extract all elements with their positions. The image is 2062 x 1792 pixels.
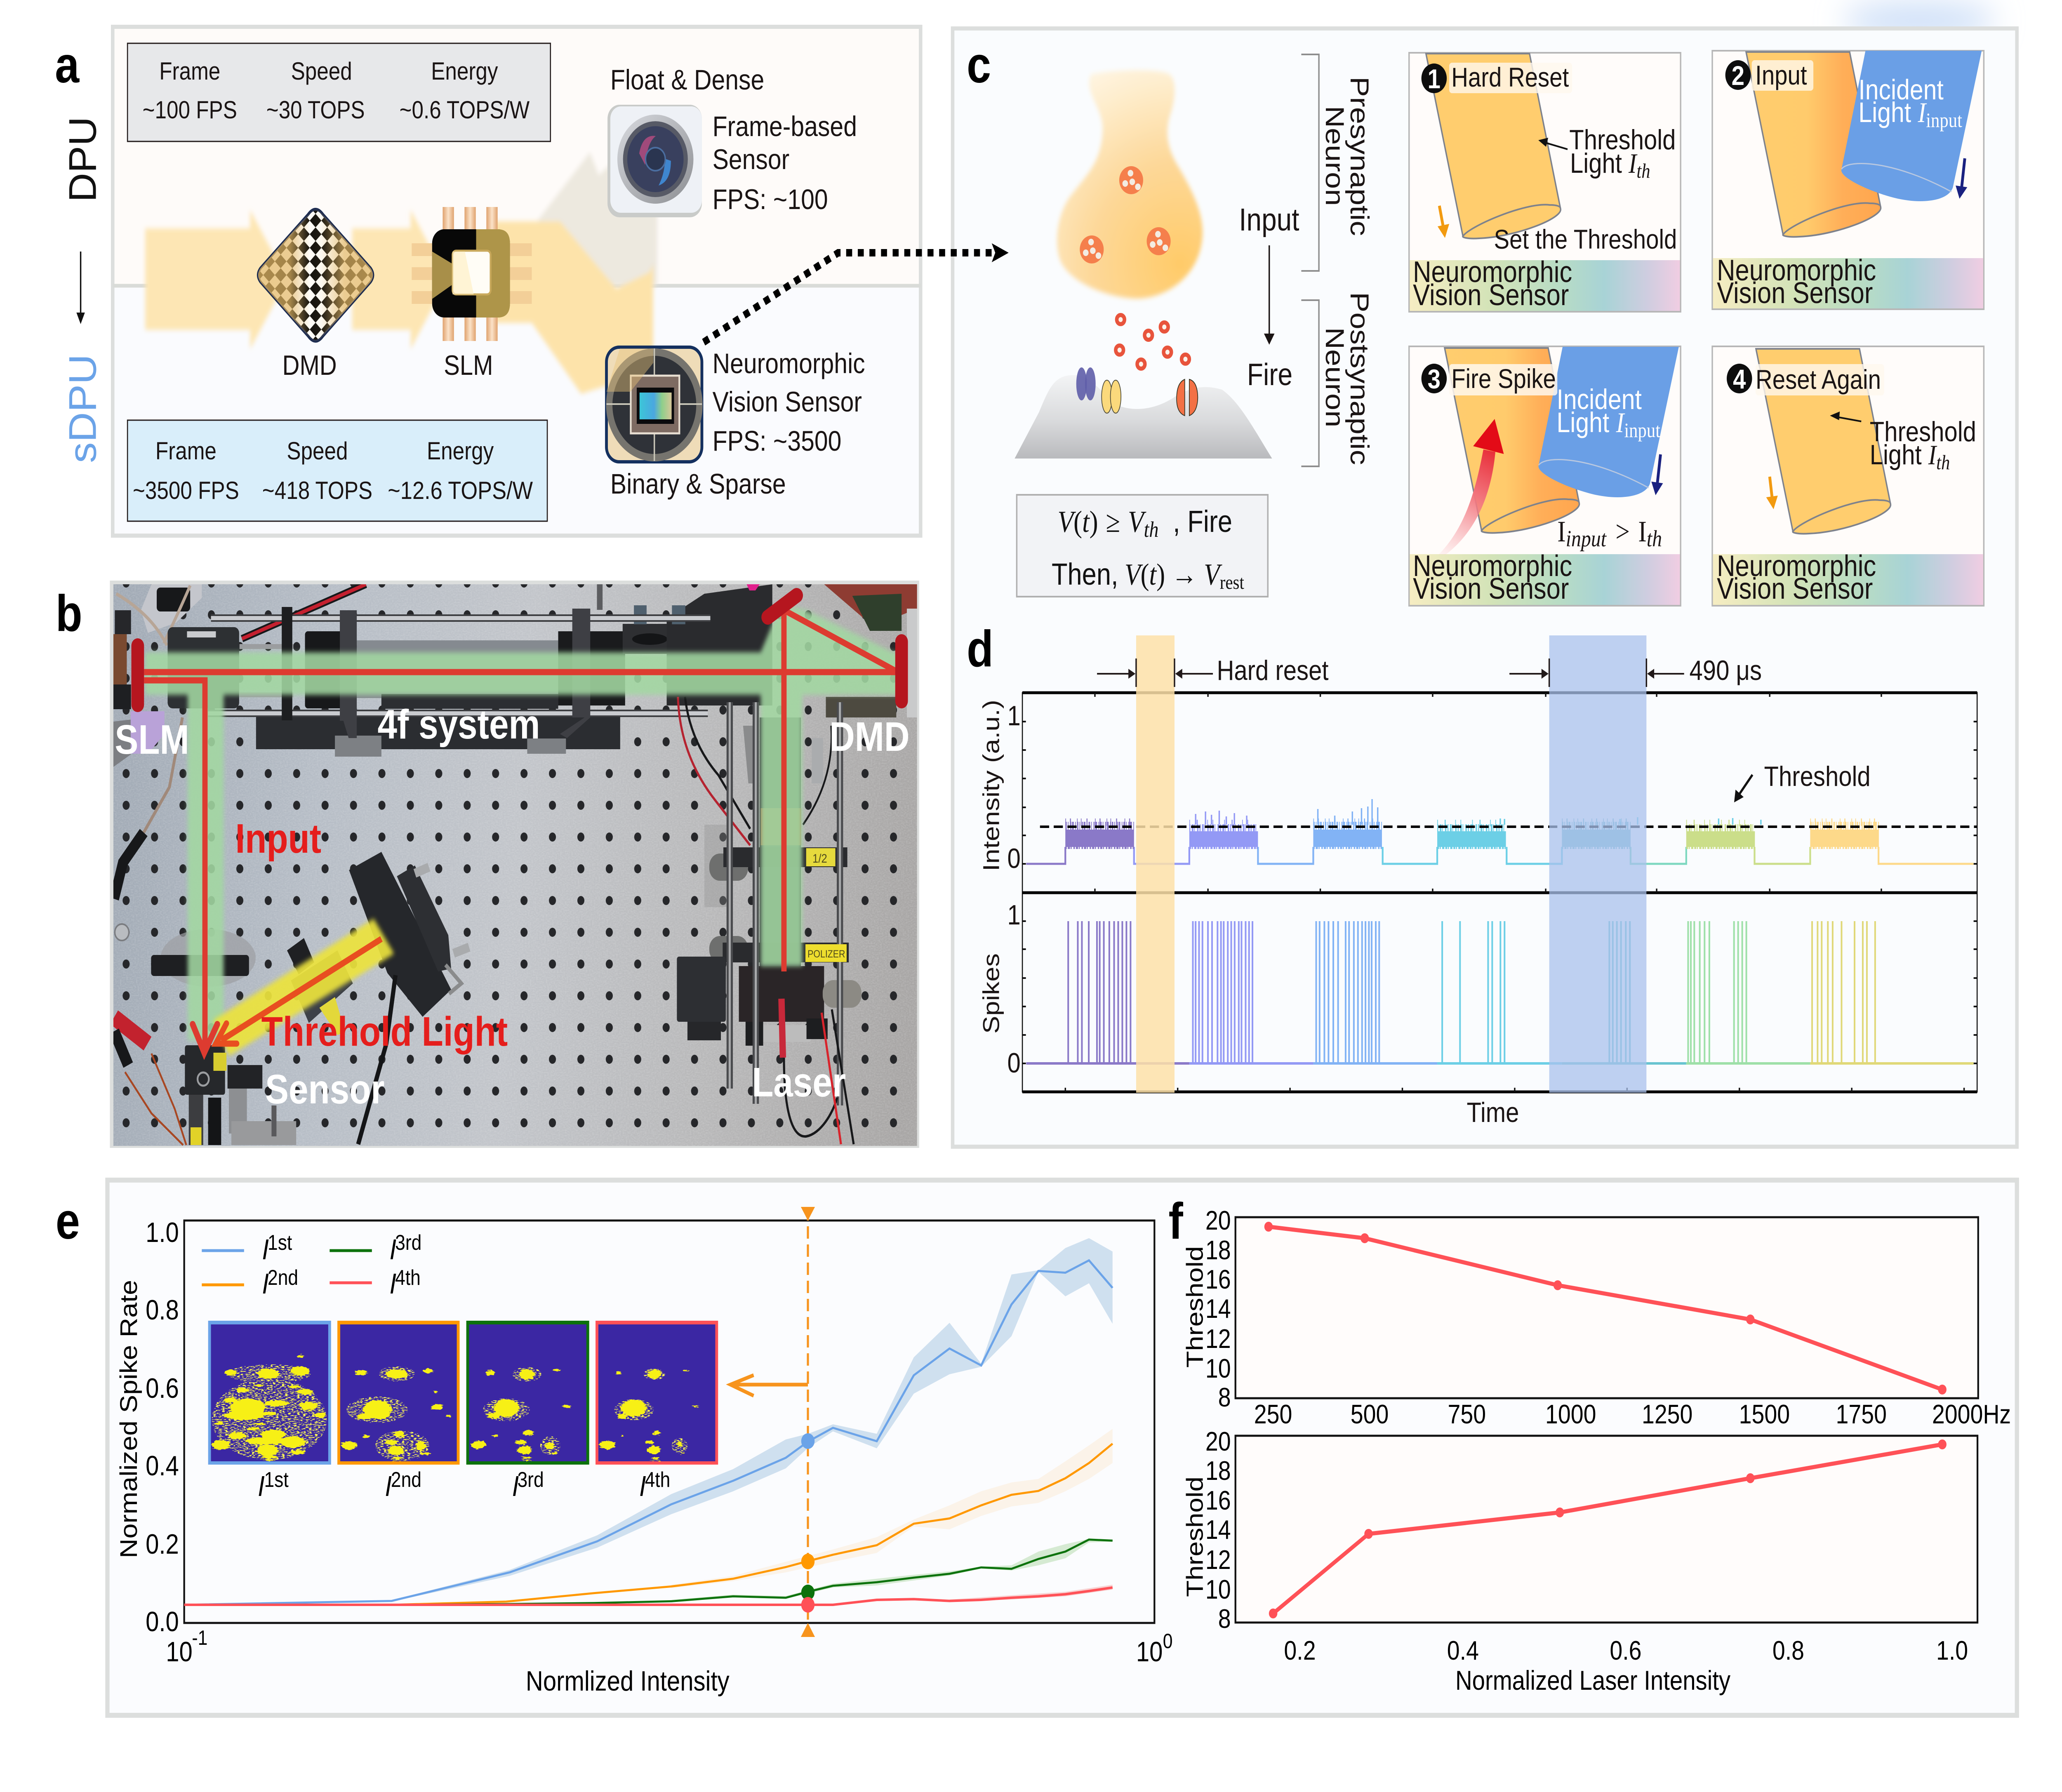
sensor label: [1413, 549, 1572, 605]
x tick labels: -1: [192, 1626, 207, 1649]
inset captions: 3rd: [517, 1468, 544, 1492]
label input: Input: [1239, 202, 1299, 238]
step number: [1727, 364, 1752, 395]
x axis title: Normalized Laser Intensity: [1455, 1665, 1730, 1696]
setup labels: SLM: [115, 717, 189, 763]
inset captions: I: [639, 1470, 646, 1502]
x tick labels: [166, 1626, 1173, 1667]
inset captions: [258, 1468, 670, 1502]
inset captions: 4th: [645, 1468, 670, 1492]
label frame-based sensor: [713, 111, 857, 215]
step title: Input: [1755, 60, 1807, 91]
orange down arrow: [1438, 206, 1449, 238]
label neuromorphic vision sensor: Vision Sensor: [713, 386, 862, 418]
x tick labels: 0: [1163, 1630, 1173, 1653]
heading DPU: DPU: [61, 117, 104, 202]
incident light label: input: [1926, 109, 1962, 132]
threshold pointer arrow: [1734, 775, 1752, 802]
label presynaptic neuron: Presynaptic: [1345, 77, 1374, 236]
inset image 1st: [208, 1321, 331, 1465]
y tick labels: [1205, 1426, 1231, 1634]
optical bench equipment along the 4f path: [167, 584, 917, 757]
incident light label: Incident: [1557, 383, 1642, 415]
y tick labels: 0.0: [146, 1606, 179, 1637]
dark blue down arrow: [1651, 454, 1663, 495]
confidence bands: [392, 1238, 1113, 1602]
label presynaptic neuron: Neuron: [1320, 106, 1349, 206]
test clips and wires: [114, 1017, 186, 1145]
step number: 1: [1428, 64, 1441, 94]
y tick labels: 18: [1205, 1235, 1231, 1265]
vesicles: [1080, 166, 1171, 263]
sensor label: Vision Sensor: [1717, 572, 1873, 605]
label a: a: [55, 37, 80, 94]
inequality: input: [1566, 527, 1607, 552]
y tick labels: 0.2: [146, 1529, 179, 1560]
threshold light cylinder: [1746, 52, 1881, 237]
inset image 2nd: [337, 1321, 459, 1465]
data points: [1269, 1439, 1947, 1618]
step number: [1422, 364, 1447, 395]
frame and sensor strip: [1409, 346, 1681, 606]
y tick labels: 12: [1205, 1545, 1231, 1575]
series lines: [184, 1261, 1113, 1605]
threshold label: Threshold: [1764, 761, 1871, 792]
plot frame: [1236, 1436, 1977, 1623]
threshold line: [1273, 1444, 1942, 1613]
y tick labels: [1205, 1205, 1231, 1412]
y tick labels: 20: [1205, 1205, 1231, 1235]
marker points: [801, 1433, 814, 1613]
label e: e: [56, 1193, 80, 1250]
sDPU stats box: [127, 420, 547, 521]
sDPU stats box: Energy: [427, 437, 494, 465]
frame and sensor strip: [1712, 346, 1984, 606]
threshold light label: [1870, 416, 1976, 474]
y tick labels: [1007, 701, 1021, 1079]
incident light label: input: [1624, 419, 1660, 442]
threshold light label: Threshold: [1870, 416, 1976, 447]
x tick labels: 0.6: [1610, 1635, 1642, 1665]
incident light cylinder: [1538, 347, 1679, 497]
threshold light cylinder: [1445, 348, 1579, 533]
dark blue down arrow: [1956, 158, 1967, 199]
spike baseline: [1026, 1062, 1974, 1065]
label postsynaptic neuron: Postsynaptic: [1345, 292, 1374, 465]
y tick labels: 0.4: [146, 1451, 179, 1482]
sDPU stats box: Frame: [155, 437, 217, 465]
y tick labels: 18: [1205, 1456, 1231, 1486]
neuromorphic vision sensor icon: [607, 347, 702, 462]
490 microsecond window band: [1549, 635, 1646, 1093]
y tick labels: 8: [1218, 1382, 1231, 1412]
y tick labels: 8: [1218, 1604, 1231, 1634]
threshold light source disc: [349, 852, 469, 1144]
sensor label: Vision Sensor: [1717, 276, 1873, 310]
wires behind right cage: [678, 697, 831, 845]
label DMD: DMD: [282, 350, 337, 381]
y tick labels: 10: [1205, 1574, 1231, 1604]
x tick labels: 0.2: [1284, 1635, 1316, 1665]
x tick labels: 10: [1136, 1637, 1163, 1667]
threshold pointer arrow: [1538, 138, 1568, 149]
label c: c: [967, 37, 991, 94]
step number: 4: [1733, 364, 1746, 395]
label frame-based sensor: Sensor: [713, 143, 789, 175]
threshold dashed line: [1040, 825, 1977, 828]
inset event blobs: [212, 1355, 698, 1461]
label fire: Fire: [1247, 357, 1292, 392]
setup labels: DMD: [829, 714, 910, 760]
firing formula box: th: [1144, 517, 1158, 542]
y tick labels: 1.0: [146, 1217, 179, 1248]
DPU stats box: Speed: [291, 57, 352, 85]
cylinder rim: [1463, 205, 1561, 236]
right optical cage: [677, 702, 862, 1144]
sensor label: [1413, 255, 1572, 312]
incident light cylinder: [1841, 51, 1982, 201]
step number: 2: [1732, 61, 1744, 91]
bottom chart: threshold vs laser intensity: [1182, 1426, 1977, 1696]
DPU stats box: [127, 43, 551, 141]
inset captions: I: [258, 1470, 265, 1502]
sensor label: Vision Sensor: [1413, 278, 1569, 312]
firing formula box: Then,V(t)→V: [1052, 557, 1220, 591]
y axis title: Threshold: [1182, 1477, 1208, 1597]
DPU stats box: ~100 FPS: [143, 96, 237, 124]
legend: 1st: [268, 1231, 292, 1255]
arrow DPU to sDPU: [76, 252, 85, 324]
DPU stats box: ~0.6 TOPS/W: [400, 96, 530, 124]
label postsynaptic neuron: [1320, 292, 1374, 465]
firing formula box: [1017, 495, 1268, 597]
red optical path lines: [144, 611, 896, 1053]
DPU stats box: Frame: [159, 57, 220, 85]
x tick labels: 1000: [1545, 1399, 1596, 1429]
threshold light label: th: [1936, 452, 1950, 474]
y tick labels: 14: [1205, 1514, 1231, 1545]
panel b frame: [111, 582, 918, 1146]
incident rim: [1539, 459, 1648, 488]
frame-based camera icon: [607, 105, 702, 217]
legend: 3rd: [395, 1231, 421, 1255]
label f: f: [1168, 1193, 1183, 1250]
half wave tag: 1/2: [812, 851, 827, 865]
setup labels: Laser: [752, 1059, 846, 1105]
sub-panel 2: input: [1712, 51, 1984, 310]
sensor label: [1717, 254, 1876, 310]
y tick labels: 0.8: [146, 1295, 179, 1326]
y tick labels: 0: [1007, 1048, 1021, 1079]
label presynaptic neuron: [1320, 77, 1374, 236]
inequality: I: [1557, 515, 1566, 548]
threshold light cylinder: [1426, 54, 1561, 238]
optical table photo illustration: [113, 584, 917, 1146]
sensor label: Neuromorphic: [1717, 549, 1876, 583]
hard reset dimension arrows: [1097, 658, 1213, 687]
half wave tag: [806, 848, 836, 866]
ring mount on the input path: [115, 924, 256, 987]
threshold light label: th: [1636, 160, 1650, 183]
x tick labels: 1250: [1642, 1399, 1692, 1429]
sensor label: [1717, 549, 1876, 605]
step number: [1422, 63, 1447, 94]
intensity pulses: [1026, 799, 1974, 864]
panel d: intensity and spike traces: [967, 621, 1977, 1128]
panel a background: [113, 27, 920, 536]
spike trains: [1068, 921, 1875, 1063]
green input beam: [145, 606, 901, 1040]
setup labels: [115, 701, 910, 1112]
heading Float and Dense: Float & Dense: [610, 64, 764, 96]
released neurotransmitters: [1116, 315, 1189, 369]
inset captions: 2nd: [391, 1468, 421, 1492]
sensor label: Vision Sensor: [1413, 572, 1569, 605]
step number: [1725, 60, 1751, 91]
sensor label: Neuromorphic: [1717, 254, 1876, 287]
490 microsecond label: 490 μs: [1689, 655, 1762, 686]
sensor assembly: [185, 1045, 296, 1145]
threshold pointer arrow: [1830, 412, 1861, 421]
legend: I: [262, 1268, 269, 1300]
postsynaptic membrane: [1015, 375, 1272, 466]
receptors: [1076, 367, 1198, 416]
top-left cables and paper: [113, 584, 202, 767]
sub-panel 4: reset again: [1712, 346, 1984, 606]
y tick labels: 1: [1007, 701, 1021, 731]
inset captions: I: [512, 1470, 519, 1502]
yellow threshold beam: [214, 919, 394, 1056]
sDPU stats box: ~418 TOPS: [262, 476, 372, 504]
y tick labels: 10: [1205, 1353, 1231, 1383]
incident light label: [1557, 383, 1660, 442]
hard reset label: Hard reset: [1217, 655, 1329, 686]
setup labels: Input: [235, 816, 321, 862]
polizer tag: POLIZER: [807, 948, 845, 959]
heading Binary and Sparse: Binary & Sparse: [610, 468, 786, 500]
panel e: spike rate chart: [56, 1193, 1173, 1697]
left cable and connector: [114, 717, 182, 899]
label neuromorphic vision sensor: FPS: ~3500: [713, 425, 841, 457]
x tick labels: [1254, 1399, 2011, 1429]
plot frames and ticks: [1022, 693, 1977, 1092]
x tick labels: 750: [1448, 1399, 1486, 1429]
panel b: optical setup photograph: [56, 582, 918, 1146]
y axis title: Normalized Spike Rate: [116, 1280, 142, 1558]
y axis title intensity: Intensity (a.u.): [978, 700, 1004, 871]
table surface: [113, 584, 917, 1146]
heading sDPU: sDPU: [61, 354, 104, 463]
legend: I: [389, 1233, 396, 1265]
cylinder rim: [1793, 500, 1890, 531]
data points: [1264, 1222, 1947, 1395]
firing formula box: rest: [1220, 571, 1244, 593]
arrow toward inset images: [730, 1375, 808, 1396]
x axis title: Normlized Intensity: [526, 1666, 730, 1697]
sDPU stats box: ~12.6 TOPS/W: [388, 476, 533, 504]
y axis title: Threshold: [1182, 1246, 1208, 1368]
DPU stats box: Energy: [431, 57, 498, 85]
y tick labels: 0.6: [146, 1373, 179, 1404]
x tick labels: 0.4: [1447, 1635, 1479, 1665]
490 microsecond dimension arrows: [1509, 658, 1684, 687]
legend: [202, 1231, 421, 1300]
inset speckle halos: [212, 1364, 687, 1461]
incident light label: Incident: [1858, 74, 1944, 106]
sub-panel 1: hard reset: [1409, 53, 1681, 312]
setup labels: Threhold Light: [261, 1009, 508, 1055]
label d: d: [967, 621, 993, 677]
inset image 4th: [596, 1321, 718, 1465]
sDPU stats box: ~3500 FPS: [133, 476, 239, 504]
y tick labels: 12: [1205, 1324, 1231, 1354]
hard reset window band: [1136, 635, 1175, 1093]
panel a: DPU versus sDPU architecture: [55, 27, 920, 536]
x tick labels: 1.0: [1936, 1635, 1968, 1665]
legend: 4th: [395, 1266, 421, 1290]
label frame-based sensor: FPS: ~100: [713, 183, 828, 215]
inequality: th: [1647, 527, 1662, 552]
threshold light label: Threshold: [1569, 125, 1676, 155]
incident light label: Light I: [1858, 96, 1926, 128]
set the threshold caption: Set the Threshold: [1494, 224, 1677, 255]
DPU stats box: ~30 TOPS: [266, 96, 365, 124]
y tick labels: 16: [1205, 1264, 1231, 1294]
sub-panel 3: fire spike: [1409, 346, 1681, 606]
sensor label: Neuromorphic: [1413, 255, 1572, 289]
presynaptic bouton: [1057, 71, 1203, 299]
plot frame: [184, 1221, 1154, 1623]
orange intensity marker line: [801, 1207, 815, 1637]
inset captions: I: [385, 1470, 392, 1502]
panel f: threshold charts: [1168, 1193, 2011, 1696]
dotted link arrow from sensor to panel c: [704, 243, 1009, 342]
orange down arrow: [1766, 477, 1778, 509]
legend: I: [389, 1268, 396, 1300]
cylinder rim: [1482, 499, 1579, 531]
threshold line: [1269, 1227, 1942, 1390]
x tick labels: 0.8: [1772, 1635, 1804, 1665]
y tick labels: 0: [1007, 843, 1021, 874]
legend: I: [262, 1233, 269, 1265]
y tick labels: 16: [1205, 1485, 1231, 1515]
step number: 3: [1428, 364, 1441, 395]
x tick labels: 1500: [1739, 1399, 1790, 1429]
label postsynaptic neuron: Neuron: [1320, 327, 1349, 427]
threshold light label: Light I: [1870, 440, 1936, 470]
threshold light label: Light I: [1570, 148, 1636, 179]
inequality: >: [1615, 515, 1630, 548]
sensor label: Neuromorphic: [1413, 549, 1572, 583]
legend: 2nd: [268, 1266, 298, 1290]
SLM chip icon: [412, 207, 532, 341]
threshold light cylinder: [1756, 349, 1890, 534]
DMD mirror icon: [258, 209, 373, 341]
polizer tag: [805, 944, 847, 962]
label neuromorphic vision sensor: [713, 348, 865, 457]
setup labels: Sensor: [265, 1066, 385, 1112]
inset captions: 1st: [264, 1468, 289, 1492]
x tick labels: 1750: [1836, 1399, 1887, 1429]
inequality: I: [1638, 515, 1647, 548]
top chart: threshold vs frequency: [1182, 1205, 2011, 1429]
label SLM: SLM: [444, 350, 493, 381]
step title: Hard Reset: [1451, 62, 1569, 93]
threshold light label: [1569, 125, 1676, 183]
x tick labels: 10: [166, 1637, 193, 1667]
panel c and d background: [953, 4, 2017, 1147]
incident light label: [1858, 74, 1962, 132]
panels e and f background: [107, 1180, 2017, 1715]
label b: b: [56, 585, 82, 642]
neuron brackets: [1301, 54, 1319, 466]
setup labels: 4f system: [377, 701, 540, 748]
label neuromorphic vision sensor: Neuromorphic: [713, 348, 865, 379]
y tick labels: 1: [1007, 900, 1021, 931]
cylinder rim: [1783, 203, 1881, 235]
red spike arrow: [1438, 419, 1504, 555]
y tick labels: 20: [1205, 1426, 1231, 1456]
arrow input to fire: [1264, 245, 1275, 345]
step title: Fire Spike: [1451, 364, 1556, 394]
light beams: [145, 124, 657, 394]
x tick labels: 500: [1351, 1399, 1389, 1429]
firing formula box: , Fire: [1166, 504, 1232, 539]
sDPU stats box: Speed: [287, 437, 348, 465]
mirrors: [138, 595, 902, 705]
inset image 3rd: [466, 1321, 589, 1465]
incident light label: Light I: [1557, 407, 1624, 438]
frame and sensor strip: [1712, 51, 1984, 309]
frame and sensor strip: [1409, 53, 1681, 312]
x tick labels: [1284, 1635, 1968, 1665]
label frame-based sensor: Frame-based: [713, 111, 857, 142]
y tick labels: [146, 1217, 179, 1637]
x tick labels: 2000Hz: [1932, 1399, 2011, 1429]
lens holder under the yellow beam: [287, 938, 353, 1035]
plot frame: [1236, 1217, 1978, 1398]
firing formula box: V(t) ≥ V: [1057, 505, 1144, 539]
incident rim: [1841, 163, 1951, 192]
x tick labels: 250: [1254, 1399, 1292, 1429]
y axis title spikes: Spikes: [978, 953, 1004, 1034]
x axis title time: Time: [1467, 1097, 1519, 1128]
step title: Reset Again: [1756, 365, 1881, 395]
y tick labels: 14: [1205, 1293, 1231, 1324]
panel c: synapse diagram: [967, 37, 1984, 606]
